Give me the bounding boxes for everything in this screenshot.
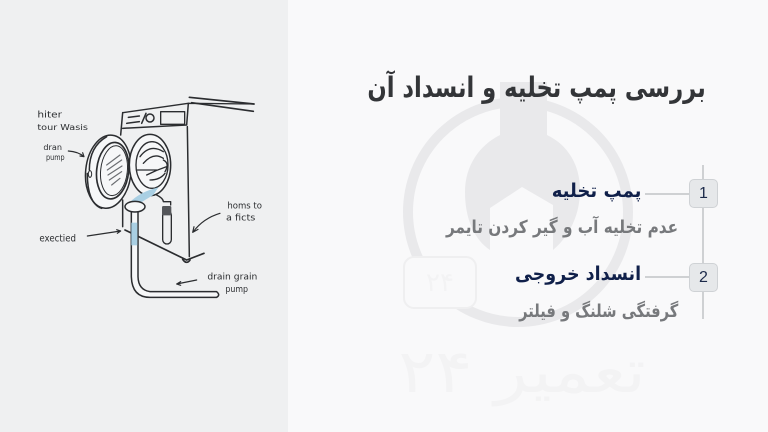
machine cabinet: [121, 97, 254, 262]
badge 1: 1: [699, 185, 708, 202]
hand-written labels: [37, 110, 262, 295]
hand-written labels: pump: [46, 153, 65, 162]
heading 2: انسداد خروجی: [515, 263, 641, 285]
hand-written labels: a ficts: [226, 214, 256, 224]
connector 1: [645, 193, 689, 195]
title: بررسی پمپ تخلیه و انسداد آن: [368, 71, 706, 104]
hand-written labels: dran: [43, 143, 62, 152]
description 2: گرفتگی شلنگ و فیلتر: [519, 301, 678, 322]
watermark: wrench logo: تعمیر ۲۴: [398, 337, 646, 407]
drum opening: [129, 134, 171, 244]
description 1: عدم تخلیه آب و گیر کردن تایمر: [446, 217, 678, 238]
badge 2: [689, 263, 718, 292]
panel: left illustration background: [0, 0, 288, 432]
badge 1: [689, 179, 718, 208]
timeline vertical line: [702, 165, 704, 319]
item 1: [445, 180, 689, 238]
hand-written labels: pump: [225, 285, 248, 295]
drain hose: [125, 201, 219, 297]
hand-written labels: homs to: [227, 202, 262, 212]
connector 2: [645, 276, 689, 278]
water stream: [129, 187, 158, 205]
heading 1: پمپ تخلیه: [551, 180, 641, 202]
hand-written labels: hiter: [37, 110, 62, 120]
open door: [82, 133, 135, 211]
watermark: wrench logo: [398, 82, 646, 407]
badge 2: 2: [699, 269, 708, 286]
watermark: wrench logo: ۲۴: [426, 268, 454, 298]
item 2: [515, 263, 689, 322]
annotation arrows: [68, 151, 220, 285]
hand-written labels: exectied: [39, 233, 76, 244]
illustration: washing machine with drain hose: [37, 96, 262, 298]
hand-written labels: drain grain: [207, 272, 257, 282]
hand-written labels: tour Wasis: [37, 123, 88, 132]
